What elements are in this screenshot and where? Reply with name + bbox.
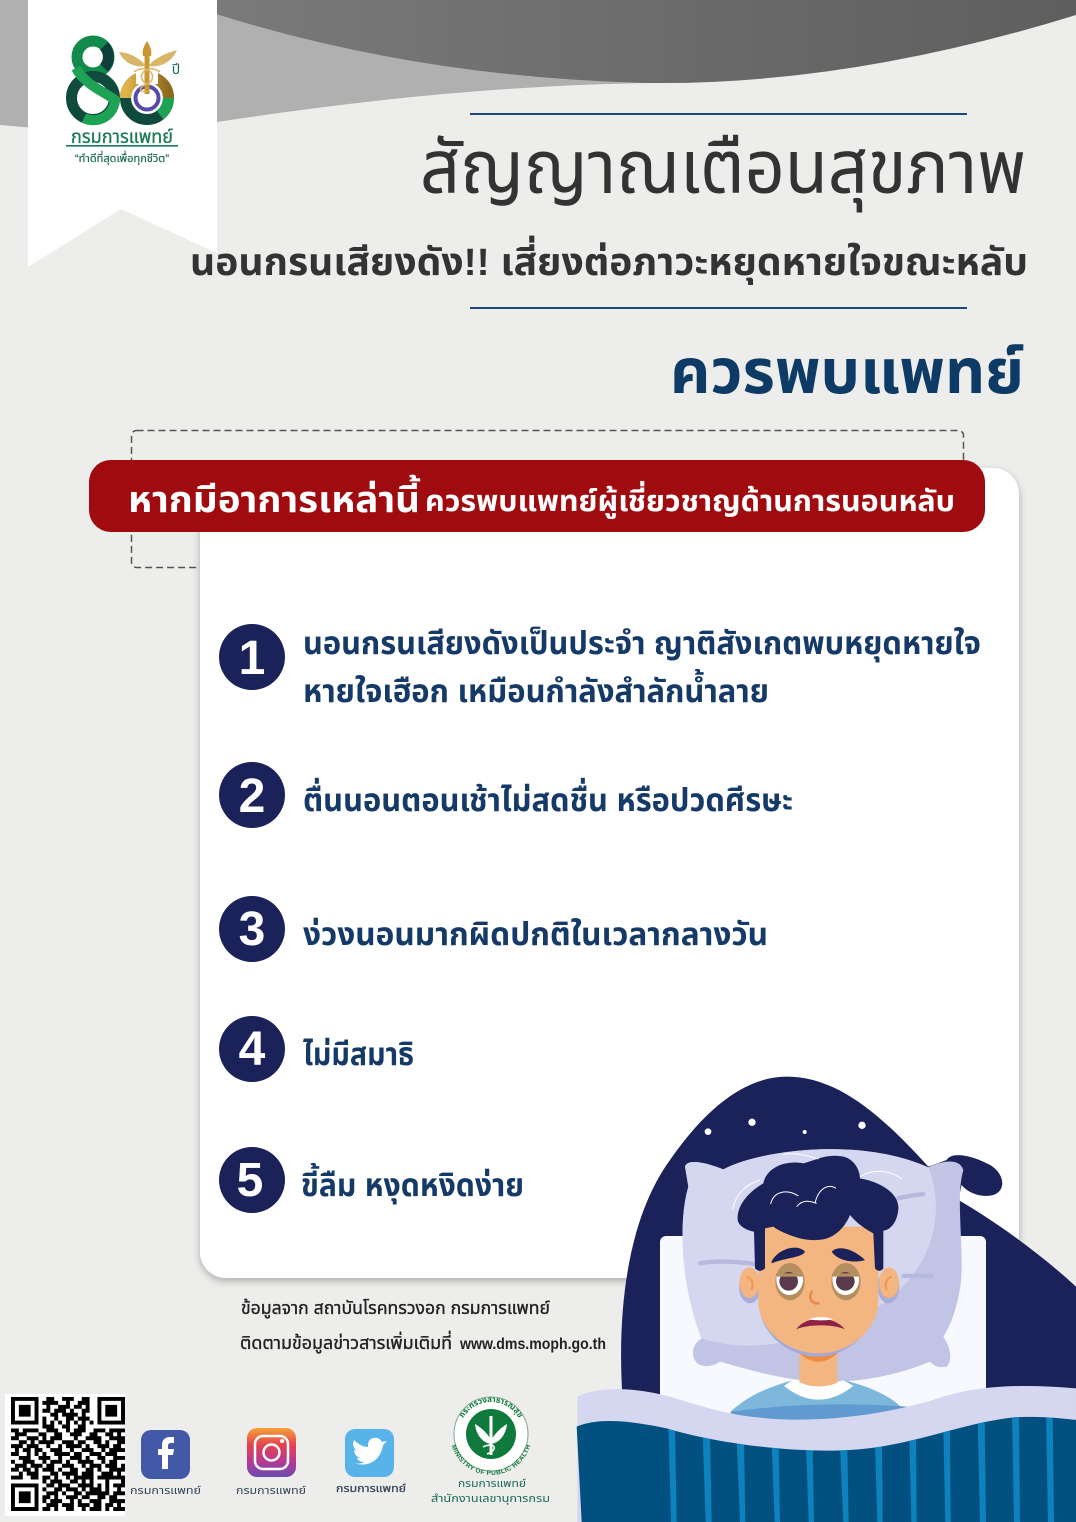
symptom 1: นอนกรนเสียงดังเป็นประจำ ญาติสังเกตพบหยุดหายใจ (303, 625, 981, 662)
icon: ministry of public health seal: MINISTRY OF PUBLIC HEALTH (452, 1444, 530, 1475)
eyes (776, 1275, 803, 1295)
icon: facebook: กรมการแพทย์ (130, 1485, 201, 1497)
icon: ministry of public health seal (452, 1396, 530, 1475)
symptom 2: ตื่นนอนตอนเช้าไม่สดชื่น หรือปวดศีรษะ (303, 777, 793, 818)
website text: ติดตามข้อมูลข่าวสารเพิ่มเติมที่ (240, 1330, 452, 1355)
symptom 4: 4 (239, 1023, 266, 1076)
source credit text: ข้อมูลจาก สถาบันโรคทรวงอก กรมการแพทย์ (241, 1298, 550, 1320)
stars (705, 1119, 866, 1135)
ministry label: กรมการแพทย์ (458, 1478, 526, 1490)
subtitle: นอนกรนเสียงดัง!! เสี่ยงต่อภาวะหยุดหายใจขณะหลับ (190, 235, 1028, 285)
symptom 3: ง่วงนอนมากผิดปกติในเวลากลางวัน (303, 916, 768, 952)
banner body text: ควรพบแพทย์ผู้เชี่ยวชาญด้านการนอนหลับ (425, 480, 955, 519)
shirt (731, 1379, 908, 1422)
header: grey curved shapes (0, 0, 1076, 130)
night sky blob (621, 1077, 1076, 1427)
mouth (796, 1319, 845, 1329)
QR code (5, 1394, 125, 1516)
logo slogan: “ทำดีที่สุดเพื่อทุกชีวิต” (75, 150, 169, 165)
website text: www.dms.moph.go.th (459, 1336, 606, 1353)
icon: instagram: กรมการแพทย์ (236, 1485, 306, 1497)
symptom 1: หายใจเฮือก เหมือนกำลังสำลักน้ำลาย (303, 668, 769, 709)
brows (772, 1248, 805, 1263)
department label: สำนักงานเลขานุการกรม (431, 1493, 550, 1505)
symptom 5 (219, 1147, 524, 1213)
symptom 4: ไม่มีสมาธิ (303, 1036, 414, 1072)
logo: 80 years mark: ปี (171, 61, 180, 77)
nose (810, 1292, 818, 1303)
eye bags (775, 1263, 805, 1300)
symptom 1: 1 (239, 632, 265, 685)
icon: ministry of public health seal: กระทรวงสาธารณสุข (460, 1397, 522, 1418)
illustration: tired man in bed (577, 1077, 1076, 1522)
heading: see a doctor: ควรพบแพทย์ (670, 338, 1024, 407)
white bookmark ribbon with logo (28, 0, 217, 267)
title: สัญญาณเตือนสุขภาพ (420, 126, 1026, 212)
icon: twitter (336, 1429, 406, 1495)
symptom 5: ขี้ลืม หงุดหงิดง่าย (301, 1162, 524, 1204)
ears (739, 1267, 899, 1303)
blanket (577, 1386, 1076, 1522)
symptom 4 (219, 1016, 414, 1082)
symptom 3: 3 (239, 903, 265, 956)
symptom 5: 5 (237, 1154, 263, 1207)
logo: 80 years mark (72, 41, 180, 120)
logo wordmark: กรมการแพทย์ (71, 127, 173, 148)
website text (240, 1330, 606, 1355)
hair (738, 1156, 898, 1271)
symptom 2 (219, 762, 793, 828)
symptom 1 (219, 624, 981, 709)
banner lead text: หากมีอาการเหล่านี้ (128, 474, 421, 520)
headboard (660, 1236, 986, 1416)
red banner (89, 460, 985, 532)
symptom 2: 2 (239, 770, 265, 823)
symptom 3 (219, 896, 768, 962)
icon: instagram (236, 1428, 306, 1497)
icon: twitter: กรมการแพทย์ (336, 1483, 406, 1495)
neck (799, 1343, 837, 1387)
face (758, 1227, 878, 1357)
icon: facebook (130, 1430, 201, 1497)
pillow (683, 1149, 963, 1382)
panel: symptoms card (200, 468, 1019, 1278)
